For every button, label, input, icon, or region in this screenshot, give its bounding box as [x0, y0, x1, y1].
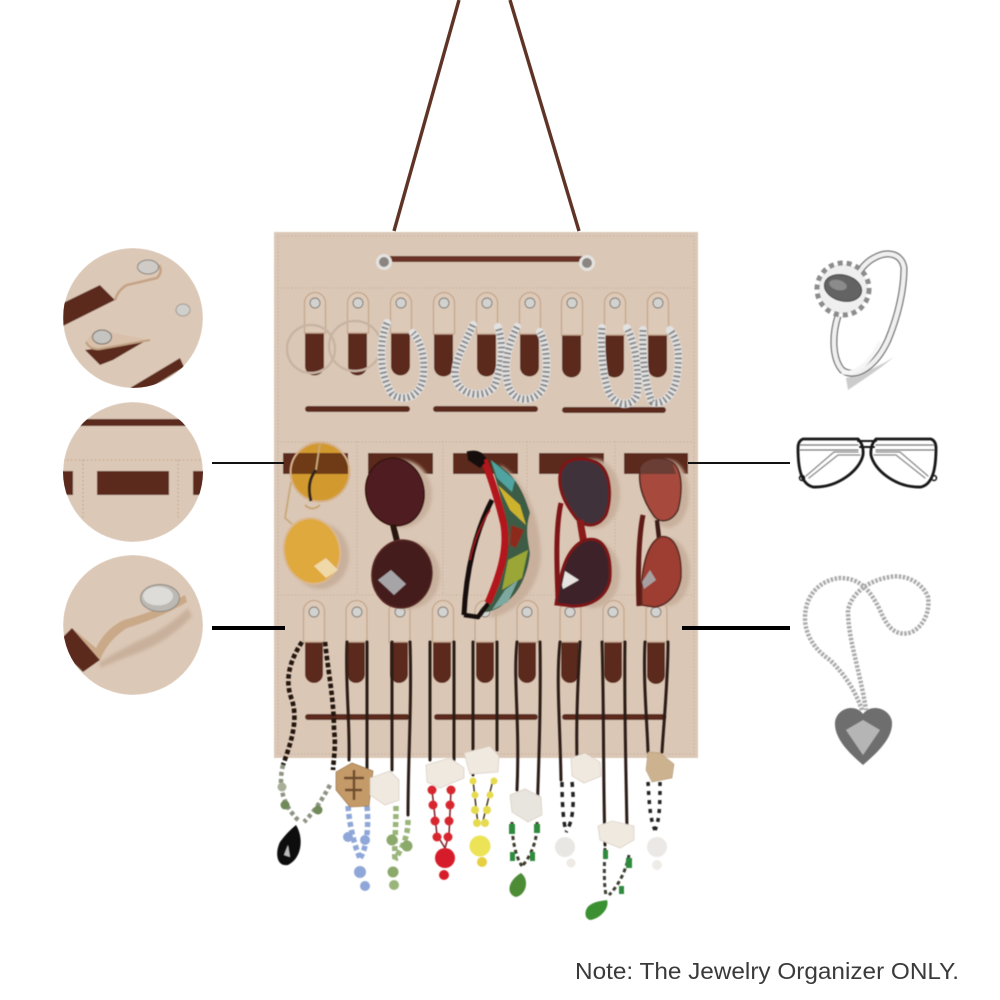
necklace 8: long green pendant [585, 642, 634, 920]
necklace 4: red beads with card [426, 642, 464, 880]
sunglasses: red lens [638, 459, 690, 607]
bottom row tabs [304, 600, 667, 684]
necklace 7: white beads with card [555, 642, 601, 868]
icon: glasses outline [798, 439, 936, 487]
note text: Note: The Jewelry Organizer ONLY. [575, 958, 959, 984]
detail circle: top snaps [63, 248, 203, 390]
organizer felt panel [274, 232, 698, 758]
necklace 9: white beads with tan card [644, 642, 674, 870]
top row horizontal slots [305, 406, 666, 413]
grommets and top strap [378, 256, 594, 270]
detail circle: single snap tab [60, 555, 203, 695]
necklace 1: black beaded with teardrop [277, 642, 335, 865]
sunglasses: red frame [556, 459, 620, 608]
sunglasses: sport wrap [464, 452, 541, 618]
icon: heart necklace [805, 576, 928, 765]
sunglasses: dark round [360, 453, 440, 612]
connector line: snap left [212, 626, 285, 630]
necklace 2: blue beads with brown card [336, 642, 373, 891]
icon: ring [817, 254, 904, 390]
connector line: glasses left [212, 462, 284, 464]
sunglasses holder slots [283, 453, 688, 474]
top row tabs [304, 292, 668, 378]
connector line: necklace right [682, 626, 790, 630]
hoop earrings [287, 321, 381, 373]
connector line: glasses right [688, 462, 790, 464]
necklace 6: green pendant with card [509, 642, 542, 897]
necklace 3: green beads with white card [370, 642, 412, 890]
sunglasses: aviators [278, 442, 350, 589]
necklace 5: yellow beads with card [464, 642, 499, 867]
silver chain earrings [381, 323, 678, 404]
detail circle: glasses slot [60, 402, 206, 542]
bottom row horizontal slots [305, 714, 666, 720]
hanging strap [394, 0, 579, 231]
